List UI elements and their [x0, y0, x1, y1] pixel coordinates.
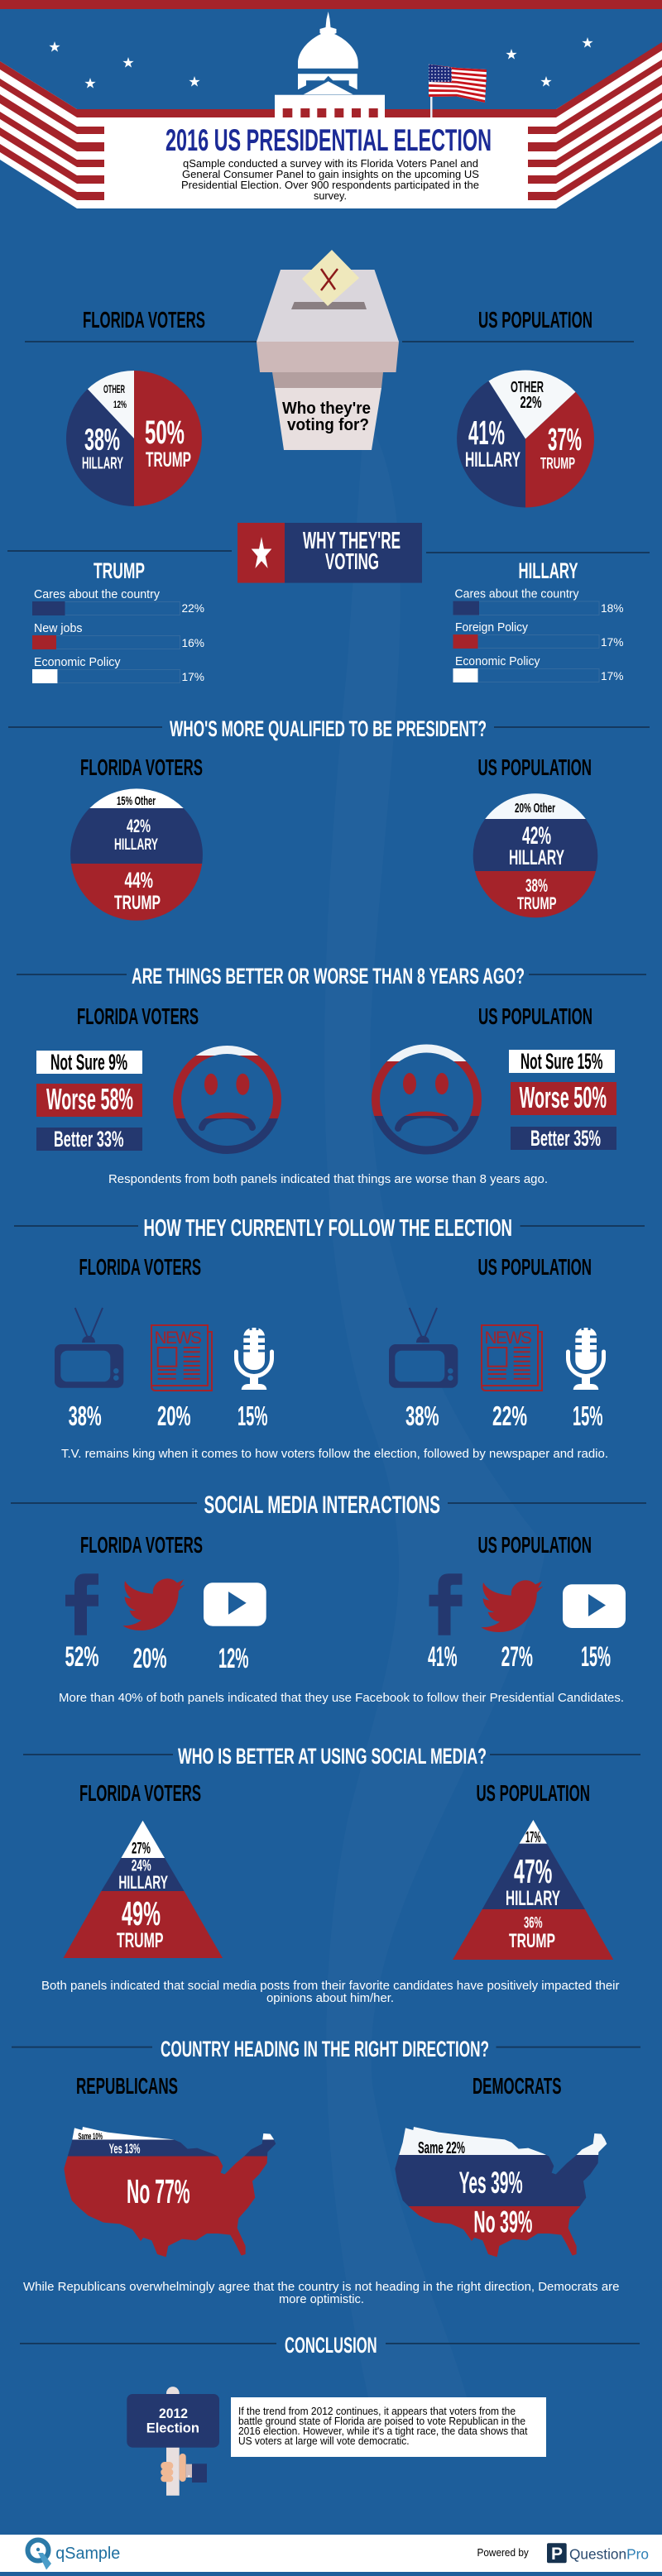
- pyramid chart: us population: [453, 1820, 613, 1960]
- ballot question: [282, 400, 371, 434]
- section heading: better at social media: WHO IS BETTER AT USING SOCIAL MEDIA?: [178, 1744, 487, 1769]
- stacked circle: us population qualified: 42%: [522, 822, 551, 850]
- conclusion text box: US voters at large will vote democratic.: [238, 2435, 410, 2447]
- stacked circle: florida voters qualified: 44%: [124, 868, 153, 893]
- pie chart: florida voters: TRUMP: [146, 448, 191, 472]
- panel: hillary reasons: Cares about the country: [455, 587, 579, 601]
- icon: hand holding 2012 election sign: [127, 2387, 219, 2496]
- stacked circle: us population qualified: [473, 793, 597, 917]
- conclusion text box: [231, 2397, 546, 2457]
- logo: questionpro: QuestionPro: [569, 2546, 649, 2563]
- pie chart: us population: 37%: [548, 423, 582, 457]
- map chart: republicans: [64, 2127, 276, 2257]
- panel: hillary reasons: Foreign Policy: [455, 620, 528, 634]
- panel heading: us population: US POPULATION: [478, 1532, 592, 1558]
- caption: [23, 2280, 619, 2306]
- icon: stars: [49, 37, 593, 89]
- icon: facebook florida: [65, 1573, 98, 1635]
- pyramid chart: florida voters: [63, 1821, 223, 1958]
- pyramid chart: us population: 17%: [525, 1829, 541, 1846]
- labels: florida voters sentiment: [36, 1050, 142, 1152]
- panel: trump reasons: Economic Policy: [34, 655, 121, 669]
- panel heading: florida voters: FLORIDA VOTERS: [83, 307, 205, 333]
- icon: youtube us: [563, 1584, 626, 1628]
- icon: facebook us: [429, 1573, 462, 1635]
- panel heading: democrats: DEMOCRATS: [473, 2073, 561, 2099]
- stacked circle: us population qualified: HILLARY: [509, 846, 564, 869]
- section heading: conclusion: CONCLUSION: [285, 2333, 377, 2358]
- value: youtube us: 15%: [581, 1641, 611, 1673]
- map chart: republicans: No 77%: [127, 2172, 190, 2210]
- pyramid chart: florida voters: TRUMP: [117, 1929, 164, 1952]
- stacked circle: florida voters qualified: [70, 788, 203, 921]
- footer: [0, 2535, 662, 2572]
- value: radio florida: 15%: [237, 1401, 268, 1431]
- panel heading: florida voters: FLORIDA VOTERS: [79, 1254, 201, 1280]
- pie chart: florida voters: 38%: [84, 423, 120, 457]
- why they're voting banner: WHY THEY'RE: [303, 528, 401, 554]
- section heading: right direction: COUNTRY HEADING IN THE RIGHT DIRECTION?: [161, 2037, 489, 2061]
- pie chart: florida voters: HILLARY: [82, 455, 123, 473]
- icon: capitol building: [275, 12, 385, 117]
- caption: Respondents from both panels indicated that things are worse than 8 years ago.: [108, 1172, 548, 1186]
- header banner: [0, 42, 662, 208]
- icon: twitter us: [481, 1580, 543, 1632]
- pyramid chart: florida voters: 24%: [132, 1858, 151, 1875]
- panel: trump reasons: [32, 558, 204, 683]
- icon: hand holding 2012 election sign: Election: [146, 2420, 199, 2435]
- icon: newspaper us: [482, 1325, 542, 1391]
- value: radio us: 15%: [573, 1401, 602, 1431]
- icon: hand holding 2012 election sign: 2012: [159, 2406, 188, 2421]
- ballot box: [257, 250, 399, 450]
- panel heading: florida voters: FLORIDA VOTERS: [80, 754, 203, 780]
- why they're voting banner: VOTING: [325, 548, 379, 574]
- icon: twitter florida: [122, 1578, 185, 1630]
- ballot question: Who they're: [282, 400, 371, 418]
- map chart: democrats: [395, 2127, 607, 2257]
- icon: newspaper florida: NEWS: [154, 1329, 202, 1348]
- icon: sad face us: [376, 1049, 477, 1150]
- value: twitter us: 27%: [501, 1641, 533, 1673]
- panel heading: us population: US POPULATION: [478, 754, 592, 780]
- section heading: who's more qualified: WHO'S MORE QUALIFIED TO BE PRESIDENT?: [170, 716, 487, 741]
- panel: trump reasons: New jobs: [34, 621, 83, 635]
- ballot question: voting for?: [287, 416, 369, 434]
- value: newspaper florida: 20%: [157, 1401, 191, 1431]
- value: youtube florida: 12%: [218, 1643, 248, 1674]
- value: twitter florida: 20%: [133, 1643, 167, 1674]
- map chart: republicans: Same 10%: [78, 2132, 103, 2142]
- caption: More than 40% of both panels indicated that they use Facebook to follow their Presidential Candidates.: [59, 1691, 624, 1705]
- pyramid chart: florida voters: HILLARY: [118, 1872, 168, 1893]
- panel: trump reasons: 22%: [182, 601, 204, 615]
- panel: hillary reasons: 17%: [601, 635, 624, 649]
- section heading: social media interactions: SOCIAL MEDIA INTERACTIONS: [204, 1491, 440, 1519]
- caption: Both panels indicated that social media posts from their favorite candidates have positively impacted their: [41, 1979, 619, 1993]
- value: newspaper us: 22%: [492, 1401, 527, 1431]
- pie chart: us population: TRUMP: [540, 455, 575, 473]
- pie chart: us population: [457, 371, 594, 508]
- top red bar: [0, 0, 662, 9]
- pyramid chart: us population: TRUMP: [509, 1930, 555, 1952]
- map chart: democrats: No 39%: [473, 2205, 532, 2239]
- panel: hillary reasons: 17%: [601, 669, 624, 682]
- why they're voting banner: [7, 523, 650, 583]
- pyramid chart: us population: 36%: [524, 1915, 543, 1932]
- map chart: republicans: Yes 13%: [109, 2141, 140, 2157]
- pie chart: florida voters: 50%: [145, 414, 185, 451]
- panel: hillary reasons: Economic Policy: [455, 654, 540, 668]
- caption: T.V. remains king when it comes to how voters follow the election, followed by newspaper and radio.: [61, 1447, 608, 1461]
- intro text: Presidential Election. Over 900 respondents participated in the: [181, 179, 479, 191]
- pyramid chart: us population: HILLARY: [506, 1887, 560, 1910]
- panel heading: florida voters: FLORIDA VOTERS: [80, 1532, 203, 1558]
- value: facebook florida: 52%: [65, 1641, 99, 1673]
- pyramid chart: florida voters: 27%: [132, 1841, 151, 1858]
- value: tv florida: 38%: [69, 1401, 102, 1431]
- panel: hillary reasons: 18%: [601, 601, 624, 615]
- stacked circle: florida voters qualified: TRUMP: [114, 892, 161, 914]
- panel heading: us population: US POPULATION: [478, 1003, 592, 1029]
- labels: us population sentiment: Better 35%: [530, 1126, 601, 1151]
- pyramid chart: us population: 47%: [514, 1852, 552, 1890]
- icon: newspaper florida: [151, 1325, 212, 1391]
- conclusion text box: If the trend from 2012 continues, it appears that voters from the: [238, 2405, 516, 2417]
- labels: florida voters sentiment: Not Sure 9%: [50, 1050, 127, 1075]
- intro text: General Consumer Panel to gain insights on the upcoming US: [182, 168, 479, 180]
- panel: hillary reasons: [453, 558, 624, 682]
- stacked circle: us population qualified: 38%: [525, 875, 548, 896]
- caption: opinions about him/her.: [266, 1991, 394, 2005]
- panel: trump reasons: TRUMP: [94, 558, 145, 583]
- pie chart: us population: HILLARY: [465, 448, 520, 472]
- icon: youtube florida: [204, 1582, 266, 1626]
- intro text: [181, 157, 479, 202]
- map chart: democrats: Yes 39%: [459, 2166, 523, 2200]
- panel: trump reasons: 17%: [182, 670, 204, 683]
- stacked circle: florida voters qualified: 15% Other: [117, 794, 156, 808]
- icon: microphone florida: [237, 1328, 271, 1390]
- stacked circle: us population qualified: TRUMP: [517, 894, 556, 913]
- panel: hillary reasons: HILLARY: [518, 558, 578, 583]
- labels: us population sentiment: [509, 1049, 616, 1151]
- logo: questionpro: [547, 2543, 649, 2564]
- caption: more optimistic.: [279, 2292, 364, 2306]
- icon: microphone us: [568, 1328, 604, 1390]
- panel heading: us population: US POPULATION: [477, 1780, 590, 1806]
- logo: qsample: qSample: [55, 2545, 120, 2563]
- icon: american flag: [429, 65, 487, 117]
- value: tv us: 38%: [405, 1401, 439, 1431]
- panel heading: us population: US POPULATION: [478, 307, 592, 333]
- value: facebook us: 41%: [428, 1641, 457, 1673]
- stacked circle: us population qualified: 20% Other: [515, 802, 555, 816]
- powered by: Powered by: [477, 2546, 529, 2559]
- logo: qsample: [28, 2540, 120, 2569]
- stacked circle: florida voters qualified: HILLARY: [114, 836, 158, 854]
- panel: trump reasons: Cares about the country: [34, 587, 160, 601]
- panel heading: florida voters: FLORIDA VOTERS: [77, 1003, 199, 1029]
- pyramid chart: florida voters: 49%: [122, 1894, 161, 1932]
- panel: trump reasons: 16%: [182, 636, 204, 649]
- pie chart: us population: OTHER: [511, 379, 544, 395]
- stacked circle: florida voters qualified: 42%: [127, 816, 151, 836]
- logo: questionpro: P: [551, 2545, 563, 2564]
- conclusion text box: battle ground state of Florida are poised to vote Republican in the: [238, 2415, 525, 2427]
- icon: tv florida: [55, 1308, 123, 1388]
- intro text: qSample conducted a survey with its Florida Voters Panel and: [183, 157, 478, 170]
- icon: tv us: [389, 1308, 458, 1388]
- pie chart: us population: 22%: [520, 394, 542, 412]
- panel heading: florida voters: FLORIDA VOTERS: [79, 1780, 201, 1806]
- panel heading: republicans: REPUBLICANS: [76, 2073, 178, 2099]
- caption: While Republicans overwhelmingly agree that the country is not heading in the right direction, Democrats are: [23, 2280, 619, 2294]
- icon: sad face florida: [177, 1050, 277, 1150]
- labels: florida voters sentiment: Worse 58%: [46, 1082, 133, 1116]
- pie chart: florida voters: OTHER: [103, 382, 125, 395]
- labels: us population sentiment: Not Sure 15%: [520, 1049, 602, 1074]
- conclusion text box: 2016 election. However, while it's a tight race, the data shows that: [238, 2425, 528, 2437]
- panel heading: us population: US POPULATION: [478, 1254, 592, 1280]
- intro text: survey.: [314, 189, 347, 202]
- pie chart: florida voters: [66, 371, 202, 506]
- caption: [41, 1979, 619, 2005]
- icon: newspaper us: NEWS: [485, 1329, 532, 1348]
- pie chart: florida voters: 12%: [113, 399, 127, 410]
- labels: florida voters sentiment: Better 33%: [54, 1127, 124, 1152]
- map chart: democrats: Same 22%: [418, 2139, 465, 2157]
- pie chart: us population: 41%: [468, 414, 505, 452]
